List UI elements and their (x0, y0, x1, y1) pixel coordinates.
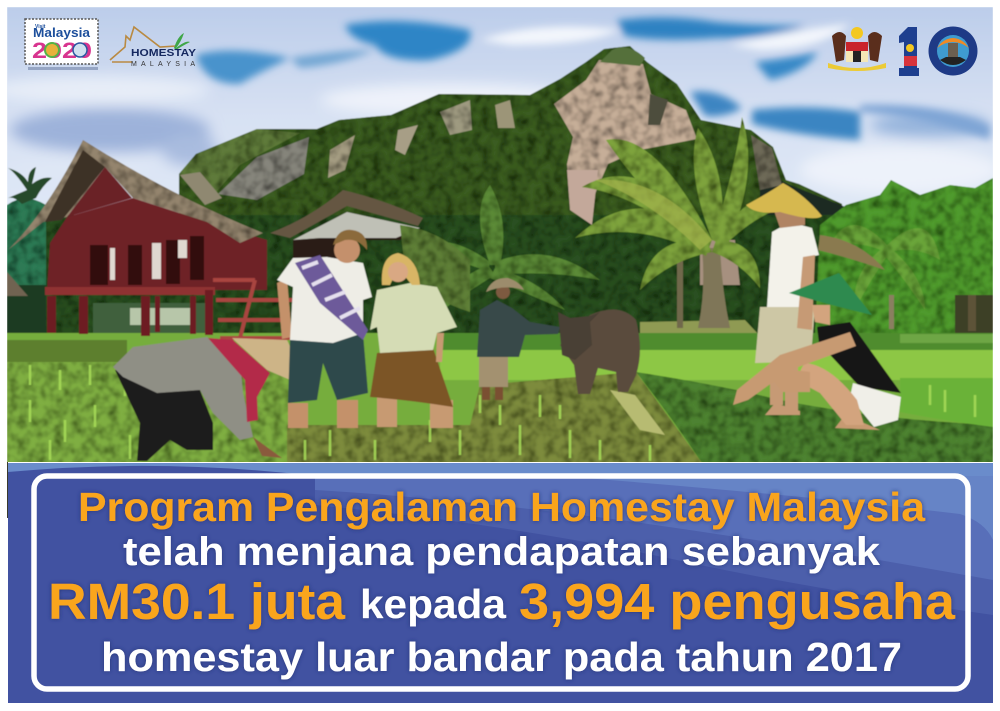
left palm fronds (444, 185, 600, 310)
logo: Visit Malaysia 2020 stamp: Malaysia (33, 25, 91, 40)
person: man with sash (277, 230, 372, 428)
headline line 2: telah menjana pendapatan sebanyak (123, 530, 881, 574)
person: woman in sarong (370, 253, 457, 428)
panel: headline band (8, 463, 993, 703)
highlight: operators: 3,994 pengusaha (519, 573, 956, 630)
highlight: revenue: RM30.1 juta (48, 573, 346, 630)
person: farmer with hat (477, 278, 560, 400)
left edge dark strip (7, 462, 8, 518)
right palm fronds (830, 225, 940, 310)
person: standing man with yellow hat (746, 183, 822, 415)
logo: Malaysian coat of arms (828, 27, 886, 71)
limestone mountain (178, 46, 844, 216)
logo: Homestay Malaysia (110, 27, 196, 68)
logo: Homestay Malaysia: HOMESTAY (131, 48, 196, 59)
photo: homestay paddy field scene (0, 7, 1000, 463)
wave decoration (8, 463, 993, 615)
rounded text frame (34, 476, 968, 689)
headline connector word: kepada (360, 581, 507, 627)
logo: Homestay Malaysia: MALAYSIA (131, 61, 195, 68)
traditional wooden house (7, 140, 423, 338)
headline line 1: Program Pengalaman Homestay Malaysia (78, 484, 926, 530)
logo: Ministry of Tourism and Culture (928, 26, 978, 76)
logo: 1Malaysia (899, 27, 919, 76)
sky with clouds (7, 7, 993, 215)
person: crouching woman with green hat (733, 273, 901, 430)
logo: Visit Malaysia 2020 stamp: Visit (35, 24, 46, 30)
person: bent woman planting (113, 337, 302, 461)
water buffalo (558, 310, 640, 394)
background tree line (7, 167, 993, 340)
headline line 4: homestay luar bandar pada tahun 2017 (101, 634, 902, 680)
coconut palms (400, 117, 976, 331)
logo: Visit Malaysia 2020 stamp: 2020 (32, 38, 92, 63)
big palm fronds (574, 117, 770, 290)
logo: Visit Malaysia 2020 stamp (25, 19, 98, 70)
paddy field (7, 333, 993, 463)
